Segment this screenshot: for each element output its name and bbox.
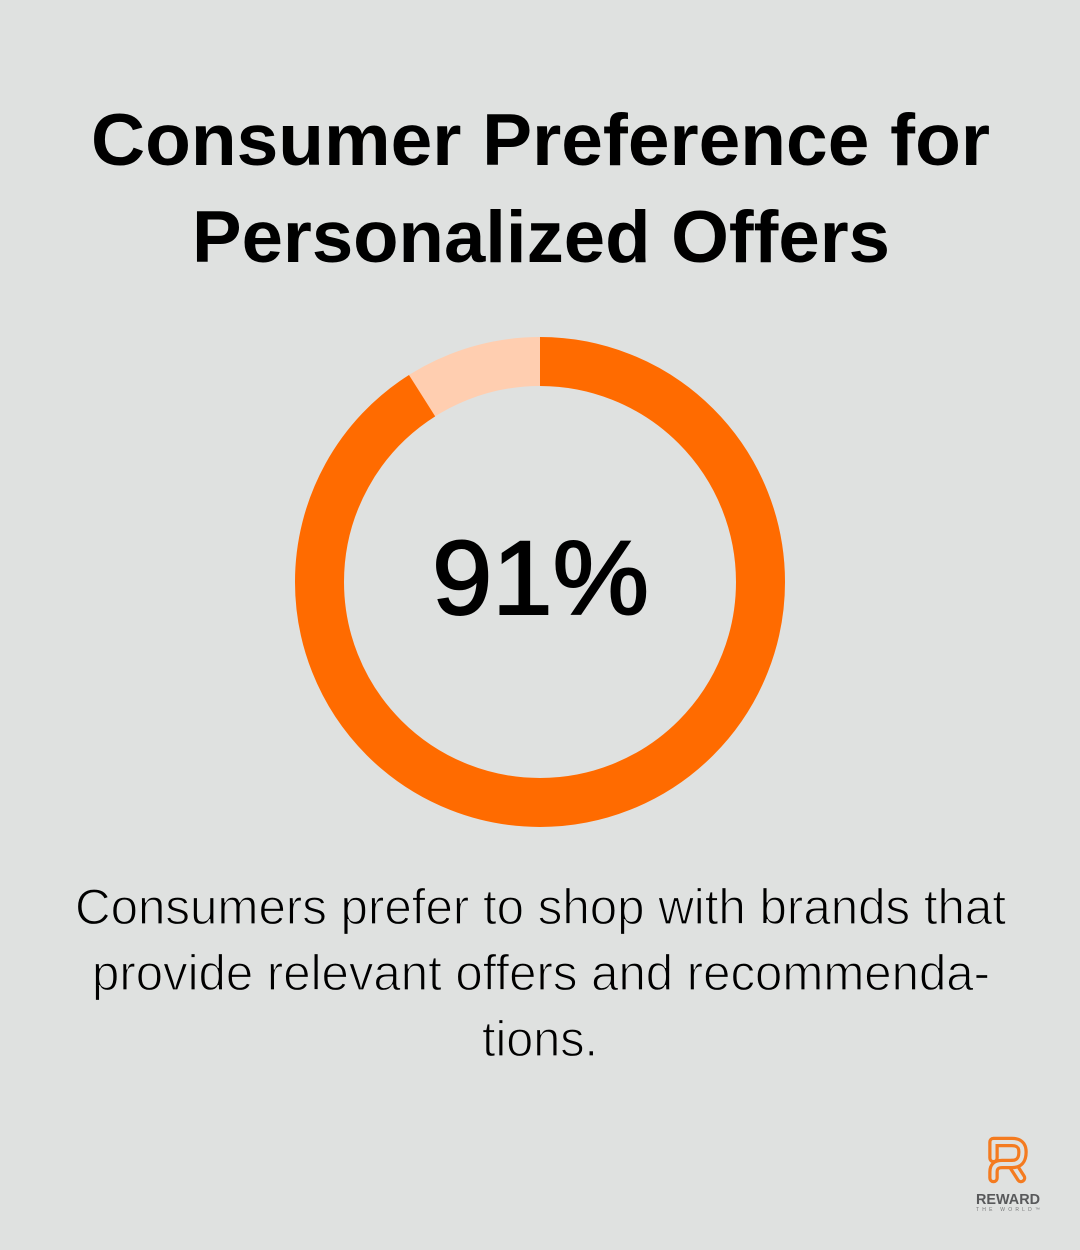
tagline: THE WORLD™ <box>976 1207 1040 1213</box>
description text: provide relevant offers and recommenda- <box>92 945 990 1001</box>
description text: Consumers prefer to shop with brands that <box>75 879 1006 935</box>
title: Personalized Offers <box>192 197 890 278</box>
donut chart: 91% <box>320 362 760 802</box>
description text <box>75 879 1006 1067</box>
title <box>91 100 990 278</box>
description text: tions. <box>482 1011 598 1067</box>
icon: R mark <box>994 1142 1022 1178</box>
logo: Reward the World <box>976 1142 1040 1213</box>
title: Consumer Preference for <box>91 100 990 181</box>
donut value: 91% <box>432 520 649 637</box>
wordmark: REWARD <box>976 1192 1040 1208</box>
